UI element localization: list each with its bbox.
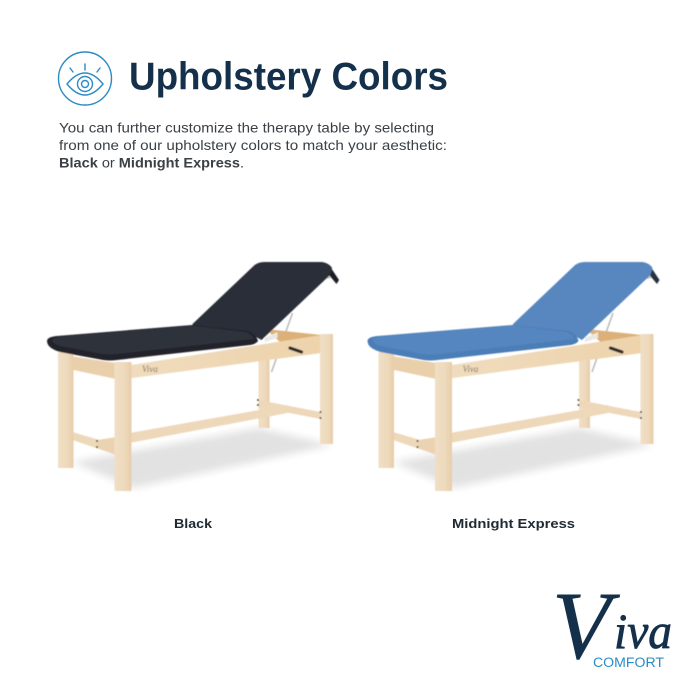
floor shadow <box>392 428 654 488</box>
support rod <box>272 313 292 372</box>
intro text: Black or Midnight Express . <box>59 154 244 170</box>
seat cushion <box>47 325 258 360</box>
support rod <box>592 313 613 372</box>
short apron <box>384 355 436 379</box>
backrest <box>513 262 652 340</box>
inner frame <box>266 329 322 342</box>
brand mark: Viva <box>462 364 479 374</box>
logo: viva comfort: V <box>552 572 620 679</box>
intro text: You can further customize the therapy table by selecting <box>59 120 434 136</box>
short apron <box>64 355 116 379</box>
seat cushion <box>368 325 578 360</box>
label: midnight express: Midnight Express <box>452 516 575 531</box>
crank handle <box>290 348 302 352</box>
therapy table: black <box>47 262 339 491</box>
brand mark: Viva <box>142 364 158 374</box>
inner frame <box>586 329 642 342</box>
long apron <box>125 335 322 379</box>
icon: eye in circle <box>58 52 112 105</box>
intro text: from one of our upholstery colors to match your aesthetic: <box>59 137 447 153</box>
legs <box>378 334 654 491</box>
backrest tab <box>642 268 660 284</box>
logo: viva comfort: COMFORT <box>593 655 664 670</box>
backrest <box>192 262 332 340</box>
label: black: Black <box>174 516 213 531</box>
long apron <box>446 335 642 379</box>
logo: viva comfort <box>552 572 672 679</box>
legs <box>58 334 333 491</box>
stretchers <box>72 400 320 455</box>
rear leg <box>258 355 270 428</box>
rear leg <box>579 355 590 428</box>
crank handle <box>610 348 622 352</box>
floor shadow <box>72 428 333 488</box>
therapy table: midnight express <box>368 262 660 491</box>
intro text <box>59 120 447 170</box>
logo: viva comfort: iva <box>614 603 672 659</box>
stretchers <box>393 400 641 455</box>
bolts <box>96 399 322 448</box>
title: Upholstery Colors <box>129 56 448 98</box>
bolts <box>416 399 642 448</box>
backrest tab <box>322 268 339 284</box>
